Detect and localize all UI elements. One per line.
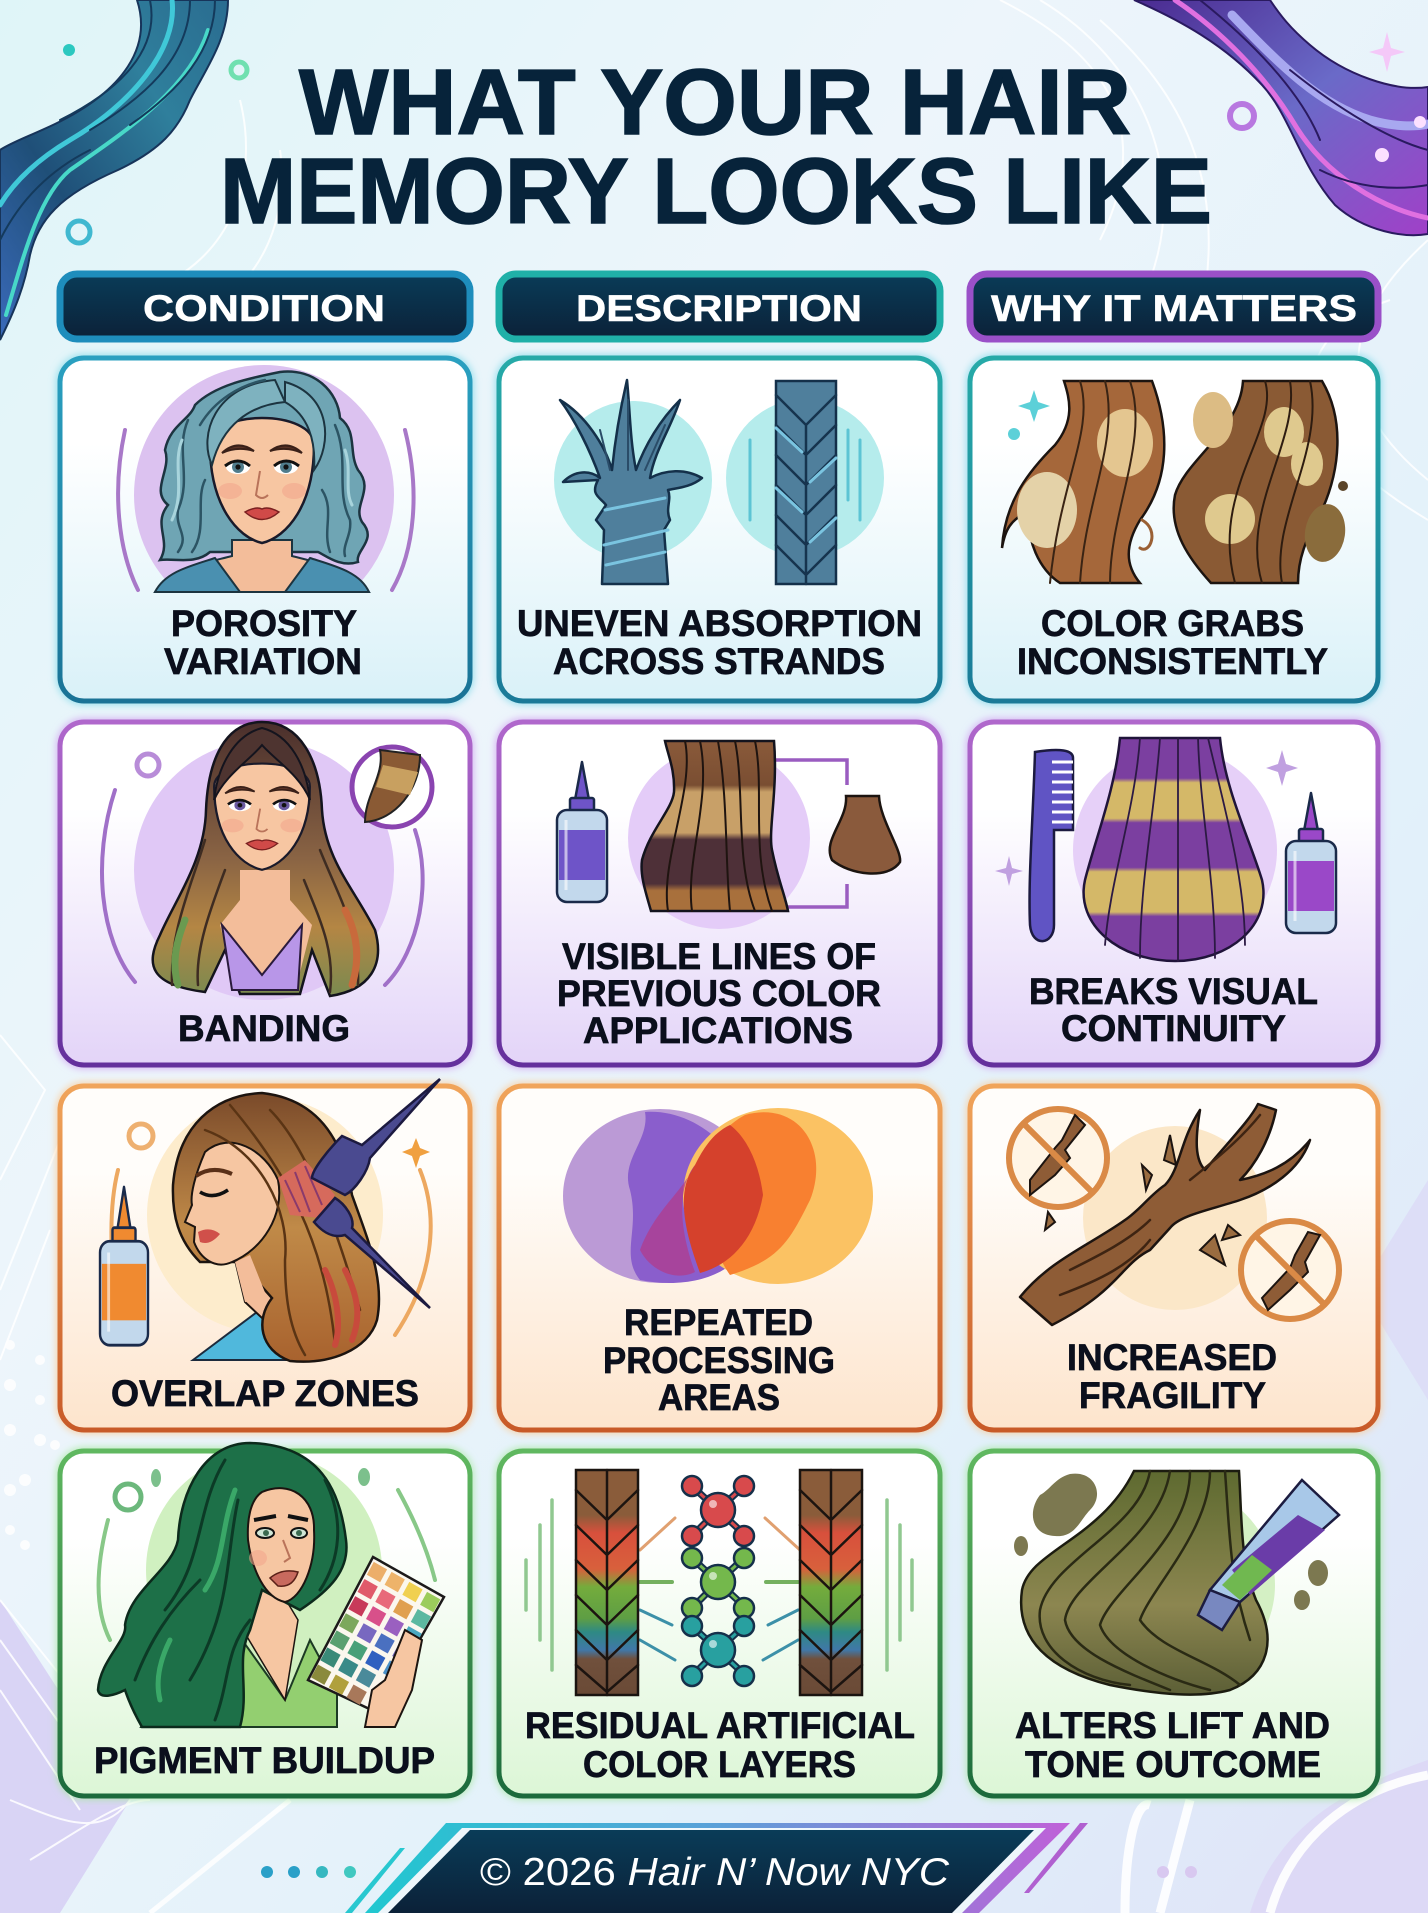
- label: OVERLAP ZONES: [111, 1373, 419, 1414]
- face: [185, 1143, 279, 1265]
- label: [517, 603, 922, 682]
- icon: molecular strands: [526, 1470, 912, 1695]
- rings and dots: [63, 44, 247, 243]
- tint tube: [1198, 1480, 1339, 1630]
- footer text: © 2026 Hair N’ Now NYC: [480, 1851, 950, 1894]
- label: BREAKS VISUAL: [1029, 971, 1318, 1012]
- header: condition: CONDITION: [143, 288, 385, 329]
- label: INCONSISTENTLY: [1017, 641, 1328, 682]
- sparkles: [995, 750, 1298, 886]
- left strand: [576, 1470, 638, 1695]
- icon: swatches and sparkle: [1008, 390, 1349, 565]
- label: [557, 936, 881, 1051]
- icon: damaged strand: [554, 380, 712, 584]
- hair: [173, 1093, 379, 1362]
- icon: olive hair and tint tube: [1014, 1471, 1339, 1695]
- label: PIGMENT BUILDUP: [94, 1740, 435, 1781]
- icon: woman having hair coloured: [100, 1079, 440, 1362]
- card: overlap zones: [60, 1079, 470, 1430]
- title: MEMORY LOOKS LIKE: [220, 139, 1212, 243]
- label: [1017, 603, 1328, 682]
- label: UNEVEN ABSORPTION: [517, 603, 922, 644]
- small swatch: [830, 796, 900, 874]
- label: CONTINUITY: [1061, 1008, 1286, 1049]
- molecules: [682, 1476, 754, 1686]
- label: [603, 1302, 835, 1418]
- header: description: [499, 274, 940, 339]
- label: APPLICATIONS: [583, 1010, 853, 1051]
- hand: [365, 1630, 422, 1727]
- hair swirl: top right: [1134, 0, 1428, 235]
- brush two: [314, 1198, 430, 1308]
- label: ALTERS LIFT AND: [1015, 1705, 1330, 1746]
- card: banding: [60, 722, 470, 1065]
- label: COLOR LAYERS: [583, 1744, 856, 1785]
- inset swatch: [352, 747, 432, 827]
- label: BANDING: [178, 1008, 350, 1049]
- colour palette: [308, 1557, 444, 1715]
- label: REPEATED: [624, 1302, 813, 1343]
- footer dots right: [1157, 1866, 1197, 1878]
- card: visible lines: [499, 722, 940, 1065]
- no symbol top: [1009, 1109, 1107, 1207]
- label: TONE OUTCOME: [1025, 1744, 1321, 1785]
- icon: woman with blue wavy hair: [116, 365, 416, 593]
- icon: striped hair: [995, 738, 1336, 961]
- icon: woman with long banded hair: [102, 722, 432, 1000]
- header: condition: [60, 274, 470, 339]
- comb: [1030, 750, 1073, 941]
- icon: patchy hair strand left: [1002, 381, 1164, 583]
- label: [164, 603, 362, 682]
- hair: [98, 1443, 347, 1727]
- header: why it matters: WHY IT MATTERS: [991, 288, 1357, 329]
- title: WHAT YOUR HAIR: [299, 50, 1131, 154]
- label: RESIDUAL ARTIFICIAL: [525, 1705, 915, 1746]
- label: COLOR GRABS: [1041, 603, 1304, 644]
- bottle: [557, 762, 607, 902]
- column headers: [60, 274, 1378, 339]
- icon: overlapping colour circles: [563, 1108, 873, 1284]
- label: FRAGILITY: [1079, 1375, 1266, 1416]
- right strand: [800, 1470, 862, 1695]
- label: VARIATION: [164, 641, 362, 682]
- brush one: [312, 1079, 440, 1195]
- label: PREVIOUS COLOR: [557, 973, 881, 1014]
- card: alters lift and tone: [970, 1451, 1378, 1796]
- card: residual artificial colour layers: [499, 1451, 940, 1796]
- tee: [193, 1300, 305, 1360]
- label: [1029, 971, 1318, 1049]
- icon: healthy braided strand: [726, 381, 884, 584]
- bottle: [100, 1187, 148, 1345]
- icon: hair with colour bands: [557, 741, 900, 929]
- header: why it matters: [970, 274, 1378, 339]
- hair swirl: top left: [0, 0, 247, 340]
- label: PROCESSING: [603, 1340, 835, 1381]
- card: uneven absorption: [499, 358, 940, 701]
- bottle: [1286, 793, 1336, 933]
- label: [525, 1705, 915, 1785]
- label: POROSITY: [171, 603, 357, 644]
- icon: patchy hair strand right: [1174, 381, 1337, 583]
- card: color grabs inconsistently: [970, 358, 1378, 701]
- card: pigment buildup: [60, 1443, 470, 1796]
- label: INCREASED: [1067, 1337, 1277, 1378]
- card: increased fragility: [970, 1086, 1378, 1430]
- header: description: DESCRIPTION: [576, 288, 862, 329]
- footer banner: [261, 1823, 1197, 1913]
- label: VISIBLE LINES OF: [562, 936, 876, 977]
- shirt: [141, 1630, 337, 1727]
- label: AREAS: [658, 1377, 780, 1418]
- label: [1015, 1705, 1330, 1785]
- icon: broken branch strand: [1009, 1104, 1339, 1325]
- label: [1067, 1337, 1277, 1416]
- card: repeated processing areas: [499, 1086, 940, 1430]
- title: [220, 50, 1212, 243]
- icon: woman with green hair and palette: [98, 1443, 444, 1727]
- sparkles and ring: [1230, 32, 1426, 162]
- card: breaks visual continuity: [970, 722, 1378, 1065]
- footer dots left: [261, 1866, 356, 1878]
- face: [248, 1488, 314, 1602]
- label: ACROSS STRANDS: [553, 641, 885, 682]
- no symbol bottom: [1241, 1221, 1339, 1319]
- card: porosity variation: [60, 358, 470, 701]
